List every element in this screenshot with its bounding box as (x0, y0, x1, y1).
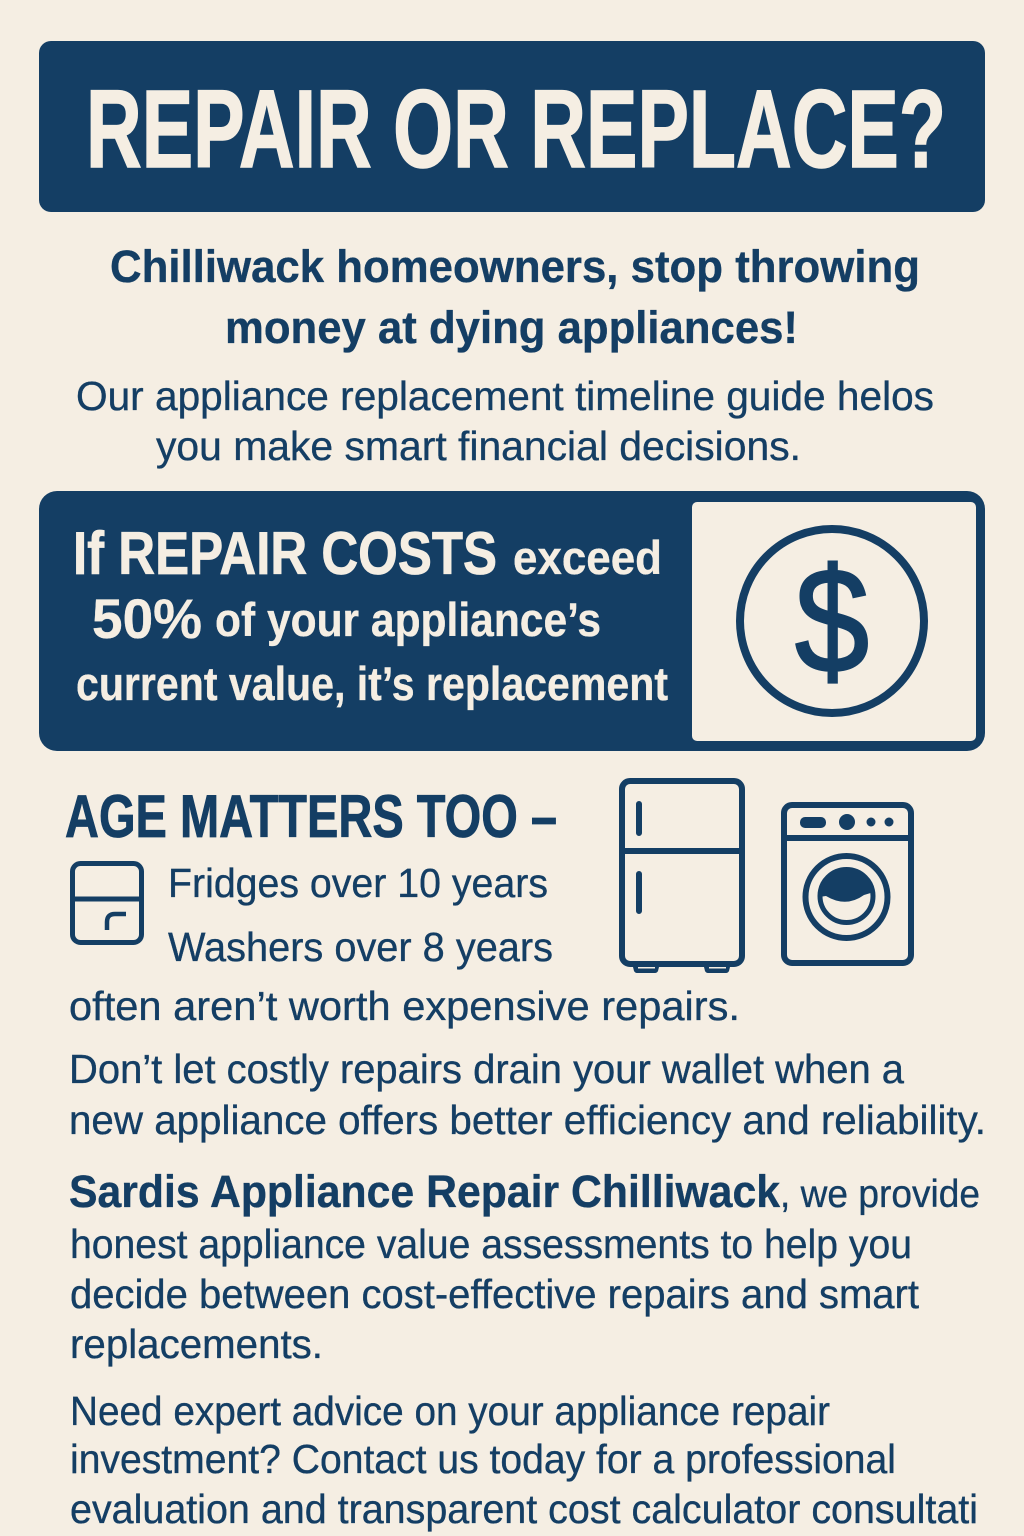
rule text: 50% (92, 587, 202, 650)
text: wallet warning (69, 1046, 986, 1143)
text: company statement: decide between cost-effective repairs and smart (70, 1271, 920, 1317)
rule text (73, 520, 668, 710)
text: company statement: replacements. (70, 1321, 323, 1367)
text: company statement: , we provide (780, 1173, 980, 1216)
icon: washing machine (784, 805, 911, 963)
title banner (39, 41, 985, 212)
age list text: Fridges over 10 years (168, 860, 548, 906)
age list text: Washers over 8 years (168, 924, 553, 970)
heading: age matters: AGE MATTERS TOO – (65, 783, 557, 850)
text: call to action (70, 1388, 978, 1532)
text: call to action: evaluation and transparent cost calculator consultati (70, 1486, 978, 1532)
intro text: you make smart financial decisions. (156, 423, 801, 469)
age list text: often aren’t worth expensive repairs. (69, 983, 740, 1029)
subheading (110, 241, 920, 353)
icon: small appliance (72, 864, 142, 942)
rule text: If REPAIR COSTS (73, 520, 497, 587)
subheading: Chilliwack homeowners, stop throwing (110, 241, 920, 292)
rule text: of your appliance’s (215, 593, 601, 646)
text: call to action: Need expert advice on your appliance repair (70, 1388, 830, 1434)
intro text (76, 373, 934, 469)
text: company statement: Sardis Appliance Repair Chilliwack (69, 1166, 781, 1217)
text: wallet warning: new appliance offers better efficiency and reliability. (69, 1097, 986, 1143)
icon panel background (692, 502, 976, 741)
age list text (69, 860, 740, 1029)
text: wallet warning: Don’t let costly repairs drain your wallet when a (69, 1046, 904, 1092)
rule text: current value, it’s replacement (76, 657, 668, 710)
subheading: money at dying appliances! (225, 302, 798, 353)
icon: dollar coin: $ (795, 537, 869, 704)
panel: 50 percent rule (39, 491, 985, 751)
text: call to action: investment? Contact us today for a professional (70, 1436, 896, 1482)
rule text: exceed (513, 531, 662, 584)
icon: dollar coin (740, 529, 924, 713)
text: company statement (69, 1166, 980, 1367)
text: company statement: honest appliance value assessments to help you (70, 1221, 912, 1267)
icon: fridge (622, 781, 742, 973)
intro text: Our appliance replacement timeline guide helos (76, 373, 934, 419)
